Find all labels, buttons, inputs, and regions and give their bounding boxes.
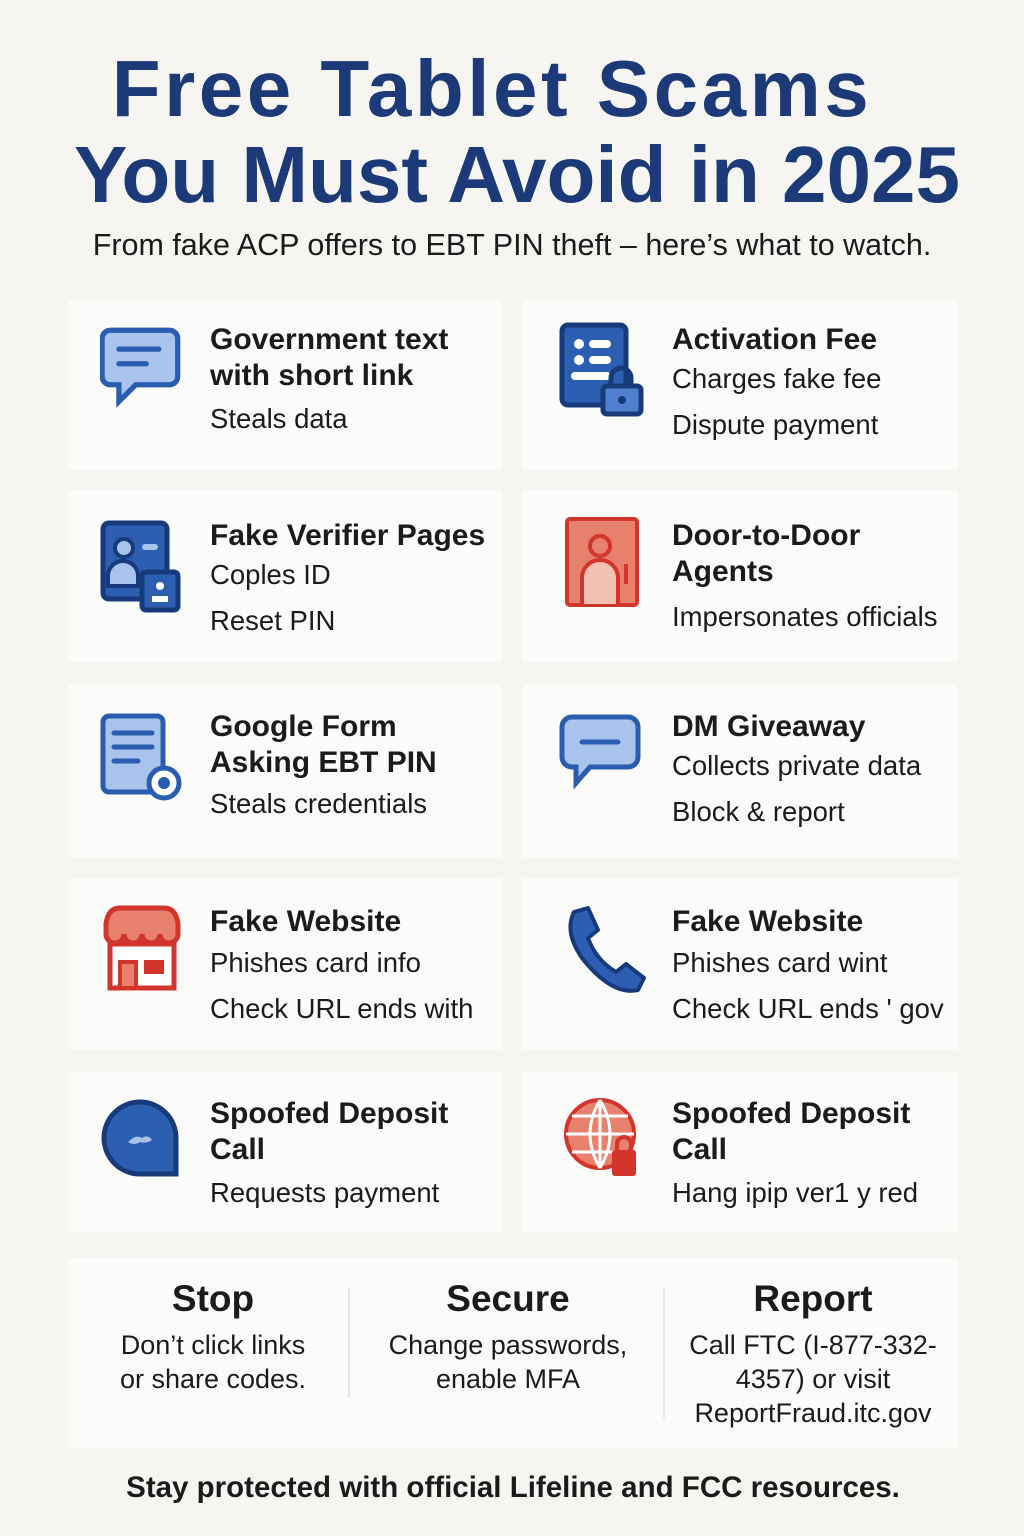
- text: Coples ID: [210, 559, 331, 590]
- footer: Stay protected with official Lifeline and FCC resources.: [126, 1471, 900, 1504]
- card: fake website right: [522, 878, 958, 1050]
- text: [210, 905, 473, 1024]
- icon: store: [104, 906, 180, 990]
- text: Government text: [210, 323, 448, 356]
- text: Google Form: [210, 710, 397, 743]
- icon: person red: [565, 517, 639, 607]
- panel: stop secure report: Report: [753, 1278, 873, 1319]
- title: You Must Avoid in 2025: [74, 130, 960, 219]
- column: secure: [348, 1288, 638, 1398]
- card: fake verifier: [68, 490, 502, 662]
- text: [672, 710, 922, 827]
- text: [210, 1097, 448, 1208]
- panel: stop secure report: Call FTC (I-877-332-: [689, 1330, 937, 1360]
- icon: form: [100, 714, 182, 800]
- text: Requests payment: [210, 1177, 439, 1208]
- column: stop: [120, 1278, 306, 1394]
- text: Block & report: [672, 796, 845, 827]
- text: [672, 323, 881, 440]
- card: spoofed deposit left: [68, 1072, 502, 1232]
- card: door-to-door: [522, 490, 958, 662]
- card: DM giveaway: [522, 685, 958, 858]
- text: [672, 905, 944, 1024]
- icon: globe lock: [564, 1098, 636, 1176]
- text: Fake Website: [672, 905, 863, 938]
- text: Impersonates officials: [672, 601, 937, 632]
- text: Steals credentials: [210, 788, 427, 819]
- text: Activation Fee: [672, 323, 877, 356]
- text: Reset PIN: [210, 605, 335, 636]
- text: Call: [672, 1133, 727, 1166]
- card: activation fee: [522, 300, 958, 470]
- text: [210, 710, 437, 819]
- icon: chat bubble: [100, 328, 180, 408]
- icon: id card: [100, 520, 180, 612]
- text: Check URL ends ' gov: [672, 993, 944, 1024]
- text: [210, 323, 448, 434]
- text: Call: [210, 1133, 265, 1166]
- title: Free Tablet Scams: [112, 44, 872, 133]
- card: spoofed deposit right: [522, 1072, 958, 1232]
- text: [672, 1097, 918, 1208]
- panel: stop secure report: enable MFA: [436, 1364, 580, 1394]
- column: stop: Stop: [172, 1278, 254, 1319]
- text: Door-to-Door: [672, 519, 860, 552]
- text: Phishes card wint: [672, 947, 888, 978]
- text: Agents: [672, 555, 774, 588]
- text: Steals data: [210, 403, 348, 434]
- column: report: [663, 1288, 953, 1418]
- panel: stop secure report: Secure: [446, 1278, 570, 1319]
- text: [210, 519, 485, 636]
- text: [672, 519, 937, 632]
- card: government text: [68, 300, 502, 470]
- column: stop: Don’t click links: [121, 1330, 305, 1360]
- panel: stop secure report: Change passwords,: [389, 1330, 627, 1360]
- text: DM Giveaway: [672, 710, 865, 743]
- text: Charges fake fee: [672, 363, 881, 394]
- card: google form: [68, 685, 502, 858]
- panel: stop secure report: ReportFraud.itc.gov: [694, 1398, 932, 1428]
- text: Hang ipip ver1 y red: [672, 1177, 918, 1208]
- text: Phishes card info: [210, 947, 421, 978]
- text: Fake Verifier Pages: [210, 519, 485, 552]
- icon: chat bubble: [560, 714, 640, 789]
- panel: stop secure report: 4357) or visit: [736, 1364, 890, 1394]
- text: Asking EBT PIN: [210, 746, 437, 779]
- text: Fake Website: [210, 905, 401, 938]
- card: fake website left: [68, 878, 502, 1050]
- icon: list lock: [560, 322, 644, 416]
- icon: round bubble: [102, 1100, 178, 1176]
- subtitle: From fake ACP offers to EBT PIN theft – here’s what to watch.: [93, 228, 931, 262]
- panel: stop secure report: [68, 1258, 958, 1448]
- text: Dispute payment: [672, 409, 878, 440]
- text: with short link: [210, 359, 413, 392]
- text: Spoofed Deposit: [672, 1097, 910, 1130]
- icon: phone: [568, 906, 646, 993]
- text: Collects private data: [672, 750, 921, 781]
- column: stop: or share codes.: [120, 1364, 306, 1394]
- text: Spoofed Deposit: [210, 1097, 448, 1130]
- text: Check URL ends with: [210, 993, 473, 1024]
- title: [74, 44, 960, 219]
